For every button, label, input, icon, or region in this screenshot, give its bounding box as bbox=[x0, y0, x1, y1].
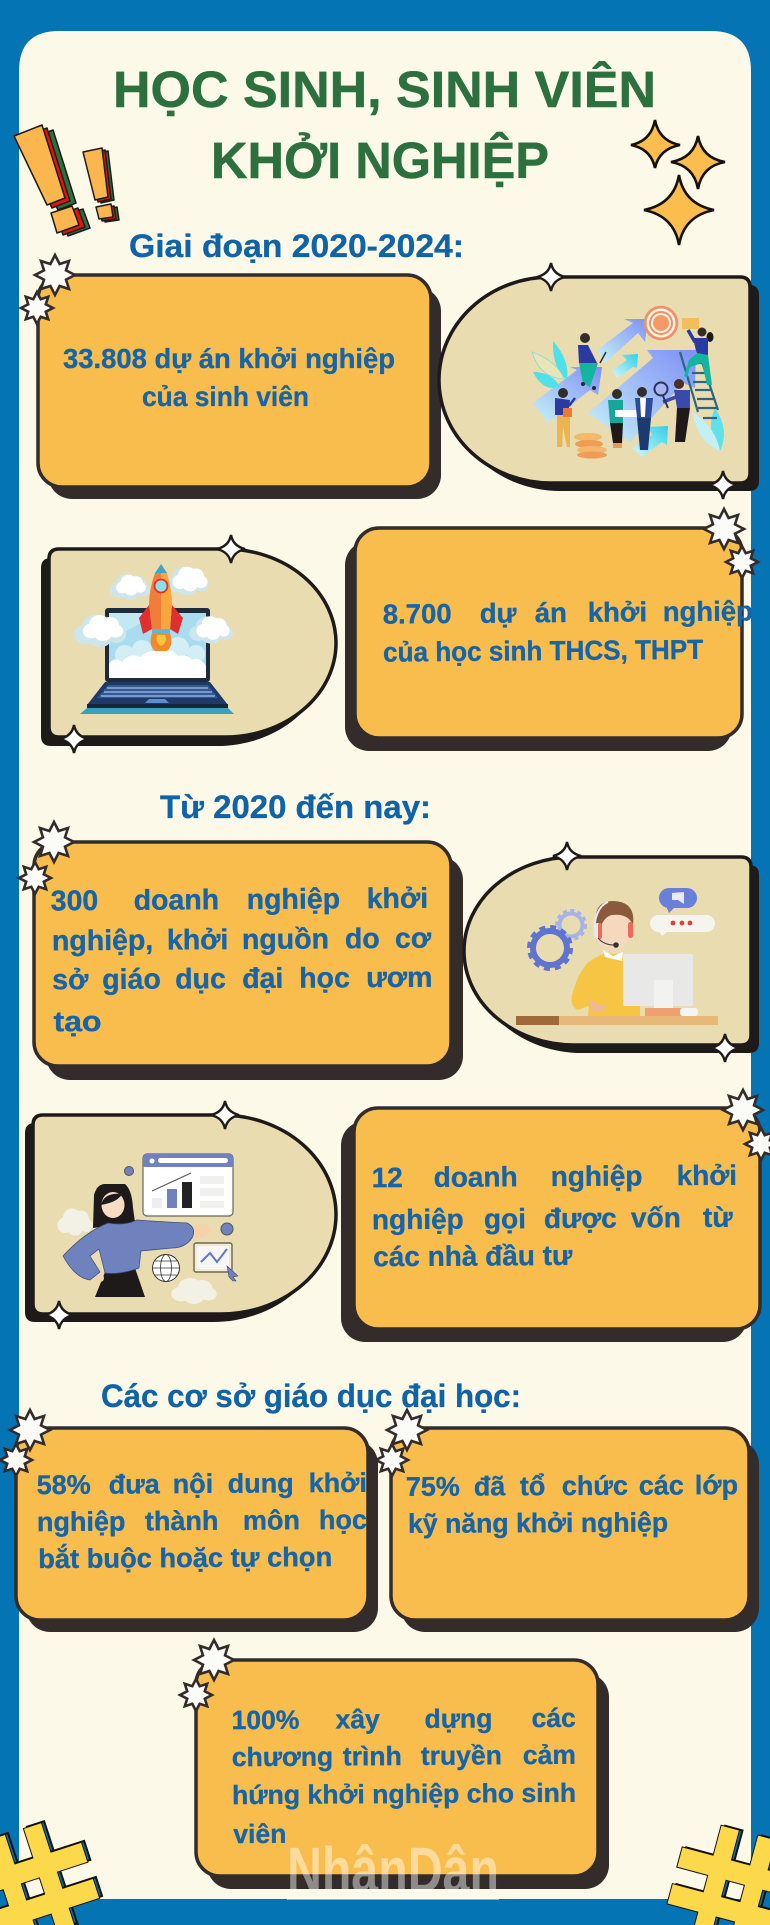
text: 100%: xây bbox=[335, 1704, 387, 1734]
text: 100%: hứng khởi nghiệp cho sinh bbox=[232, 1778, 576, 1810]
text: 33.808: của sinh viên bbox=[142, 381, 309, 412]
icon: gold sparkles bbox=[631, 120, 725, 245]
text: 100%: chương bbox=[232, 1741, 341, 1772]
illustration: team and arrows bbox=[532, 306, 724, 458]
climber bbox=[684, 328, 714, 385]
text: 300 enterprises: học bbox=[299, 962, 358, 995]
text: 300 enterprises: doanh bbox=[134, 884, 227, 917]
text: 300 enterprises: dục bbox=[175, 963, 234, 995]
text: 300 enterprises: nguồn bbox=[242, 923, 337, 956]
text: 8.700: 8.700 bbox=[383, 598, 459, 630]
icon: hash right bbox=[649, 1817, 770, 1925]
text: 12 enterprises: doanh bbox=[434, 1161, 526, 1193]
text: 300 enterprises: cơ bbox=[395, 923, 432, 955]
text: 8.700: dự bbox=[480, 597, 524, 629]
text: 300 enterprises: sở bbox=[52, 964, 96, 996]
text: 58%: khởi bbox=[309, 1468, 367, 1498]
text: 300 enterprises: do bbox=[345, 923, 388, 955]
text: 58%: thành bbox=[145, 1506, 226, 1536]
panel: presenter illustration bbox=[25, 1101, 336, 1329]
man with magnifier bbox=[654, 379, 690, 442]
icon: white stars bbox=[0, 1410, 50, 1476]
text: 58%: nghiệp bbox=[37, 1506, 133, 1537]
icon: white stars bbox=[376, 1410, 427, 1476]
text: 300 enterprises: khởi bbox=[167, 924, 236, 957]
icon: sparkle bbox=[211, 1101, 239, 1129]
text: 100% bbox=[231, 1703, 577, 1849]
text: 12 enterprises: khởi bbox=[677, 1160, 737, 1191]
man bbox=[615, 387, 653, 450]
panel: team illustration bbox=[439, 263, 759, 499]
icon: sparkle bbox=[60, 725, 88, 753]
text: 75%: đã bbox=[474, 1471, 513, 1502]
panel: 300 enterprises bbox=[19, 822, 463, 1080]
icon: sparkle bbox=[217, 535, 245, 563]
text: 58% bbox=[37, 1468, 368, 1574]
seated person bbox=[578, 333, 606, 390]
text: 58%: nội bbox=[173, 1469, 221, 1499]
text: 12 enterprises bbox=[372, 1160, 738, 1272]
icon: hash left bbox=[0, 1811, 124, 1925]
text: 75%: tổ bbox=[520, 1471, 553, 1501]
panel: 100% bbox=[180, 1640, 609, 1889]
icon: white stars bbox=[21, 255, 75, 324]
text: 8.700: khởi bbox=[588, 596, 655, 628]
text: 12 enterprises: các nhà đầu tư bbox=[373, 1240, 573, 1272]
text: 100%: trình bbox=[343, 1741, 409, 1771]
text: 75%: kỹ năng khởi nghiệp bbox=[408, 1507, 668, 1539]
text: 58%: dung bbox=[228, 1468, 301, 1499]
title bbox=[113, 60, 656, 189]
panel: 12 enterprises bbox=[341, 1090, 770, 1342]
icon: white stars bbox=[19, 822, 74, 894]
text: 12 enterprises: 12 bbox=[372, 1162, 411, 1193]
illustration: agent at desk bbox=[516, 888, 718, 1025]
text: 8.700: án bbox=[535, 597, 575, 628]
text: 300 enterprises: ươm bbox=[366, 962, 433, 994]
text: 58%: môn bbox=[243, 1505, 308, 1536]
panel: 58% bbox=[0, 1410, 378, 1632]
text: 100%: viên bbox=[233, 1819, 286, 1849]
illustration: woman presenting charts bbox=[58, 1154, 238, 1304]
text: 300 enterprises: nghiệp bbox=[247, 883, 348, 916]
text: 75%: chức bbox=[562, 1471, 636, 1501]
text: 12 enterprises: gọi bbox=[484, 1203, 534, 1234]
text: 100%: truyền bbox=[421, 1740, 509, 1771]
panel: 8.700 school projects bbox=[345, 509, 758, 751]
title: HỌC SINH, SINH VIÊN bbox=[113, 60, 656, 118]
text: 300 enterprises: nghiệp, bbox=[52, 925, 161, 957]
text: 75%: lớp bbox=[695, 1470, 738, 1500]
text: 300 enterprises: đại bbox=[242, 963, 291, 995]
text: 12 enterprises: từ bbox=[703, 1202, 733, 1233]
text: 8.700: của học sinh THCS, THPT bbox=[383, 634, 703, 668]
icon: sparkle bbox=[45, 1301, 73, 1329]
text: 100%: các bbox=[531, 1703, 576, 1733]
text: 8.700 bbox=[383, 595, 753, 668]
heading: Từ 2020 đến nay: Từ 2020 đến nay: bbox=[160, 789, 431, 825]
text: 100%: 100% bbox=[231, 1705, 307, 1735]
text: 300 enterprises: khởi bbox=[367, 883, 428, 915]
watermark: NhânDân bbox=[287, 1834, 499, 1906]
text: 12 enterprises: nghiệp bbox=[551, 1160, 650, 1192]
text: 300 enterprises bbox=[51, 883, 433, 1038]
icon: white stars bbox=[723, 1090, 770, 1160]
text: 33.808 bbox=[63, 343, 395, 412]
panel: support agent illustration bbox=[464, 842, 759, 1062]
text: 12 enterprises: được bbox=[544, 1202, 625, 1234]
left person bbox=[555, 388, 575, 447]
illustration: laptop and rocket bbox=[74, 564, 234, 714]
icon: white stars bbox=[704, 509, 758, 578]
title: KHỞI NGHIỆP bbox=[211, 131, 549, 189]
text: 75%: 75% bbox=[406, 1472, 467, 1502]
text: 12 enterprises: nghiệp bbox=[372, 1204, 472, 1235]
icon: sparkle bbox=[553, 842, 581, 870]
icon: sparkle bbox=[711, 1034, 739, 1062]
text: 33.808: 33.808 dự án khởi nghiệp bbox=[63, 343, 395, 374]
text: 58%: 58% bbox=[37, 1470, 98, 1500]
text: 100%: dựng bbox=[424, 1703, 500, 1734]
middle woman bbox=[608, 389, 623, 448]
icon: sparkle bbox=[709, 471, 737, 499]
text: 58%: học bbox=[319, 1505, 367, 1535]
panel: rocket illustration bbox=[41, 535, 336, 753]
text: 300 enterprises: 300 bbox=[51, 885, 106, 917]
text: 75% bbox=[406, 1470, 738, 1539]
text: 8.700: nghiệp bbox=[663, 595, 753, 627]
text: 58%: bắt buộc hoặc tự chọn bbox=[38, 1541, 332, 1574]
heading: Các cơ sở giáo dục đại học: Các cơ sở giáo dục đại học: bbox=[101, 1378, 521, 1414]
text: 75%: các bbox=[639, 1470, 691, 1501]
text: 12 enterprises: vốn bbox=[631, 1202, 689, 1233]
text: 300 enterprises: tạo bbox=[53, 1006, 102, 1038]
heading: Giai đoạn 2020-2024: Giai đoạn 2020-2024: bbox=[129, 228, 464, 264]
text: 300 enterprises: giáo bbox=[102, 963, 169, 996]
text: 58%: đưa bbox=[109, 1469, 167, 1500]
text: 100%: cảm bbox=[523, 1740, 576, 1770]
icon: exclamation marks bbox=[14, 125, 119, 236]
panel: 33.808 student projects bbox=[21, 255, 441, 499]
icon: sparkle bbox=[537, 263, 565, 291]
panel: 75% bbox=[376, 1410, 759, 1632]
icon: white stars bbox=[180, 1640, 234, 1711]
